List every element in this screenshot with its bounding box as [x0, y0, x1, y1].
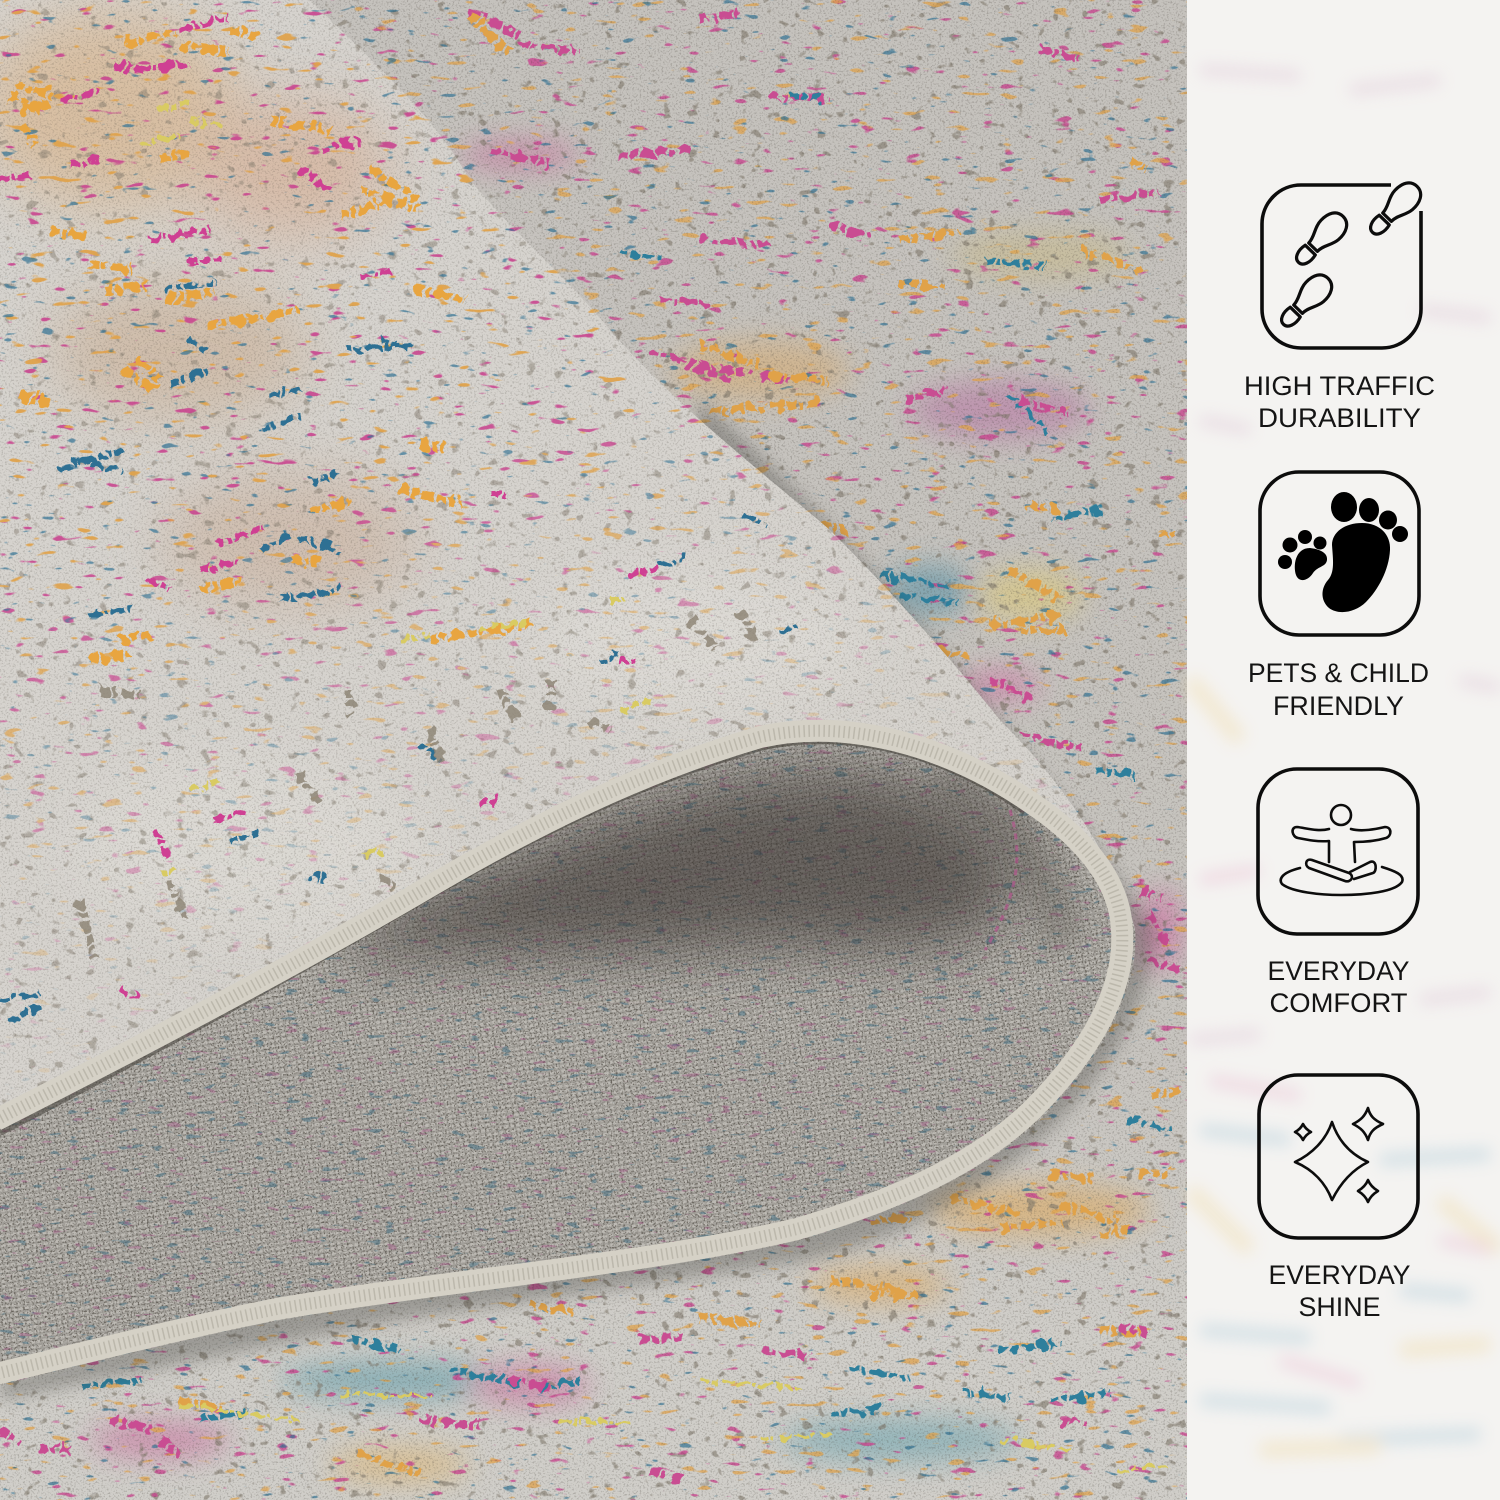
label: everyday comfort [1268, 956, 1410, 1018]
panel: features sidebar [1187, 0, 1500, 1500]
label: pets and child friendly: PETS & CHILD [1248, 658, 1429, 688]
label: everyday shine: EVERYDAY [1268, 1260, 1411, 1290]
photo: underside of rolled rug [0, 742, 1136, 1385]
photo: rug floor background [0, 0, 1187, 1500]
label: high traffic durability: DURABILITY [1258, 403, 1421, 433]
icon: seated meditation on rug [1258, 769, 1418, 934]
label: everyday shine [1268, 1260, 1411, 1322]
label: high traffic durability [1244, 371, 1435, 433]
label: pets and child friendly: FRIENDLY [1273, 691, 1404, 721]
label: high traffic durability: HIGH TRAFFIC [1244, 371, 1435, 401]
label: pets and child friendly [1248, 658, 1429, 721]
icon: paw and child footprint [1260, 472, 1419, 635]
label: everyday shine: SHINE [1298, 1292, 1380, 1322]
label: everyday comfort: COMFORT [1270, 988, 1408, 1018]
icon: sparkles [1259, 1075, 1418, 1238]
photo: top pile surface of rolled rug [0, 0, 1140, 1120]
label: everyday comfort: EVERYDAY [1268, 956, 1410, 986]
icon: footprints [1262, 177, 1426, 348]
shadow cast by the roll [0, 400, 1155, 1400]
photo: rug edge hem [0, 731, 1122, 1374]
